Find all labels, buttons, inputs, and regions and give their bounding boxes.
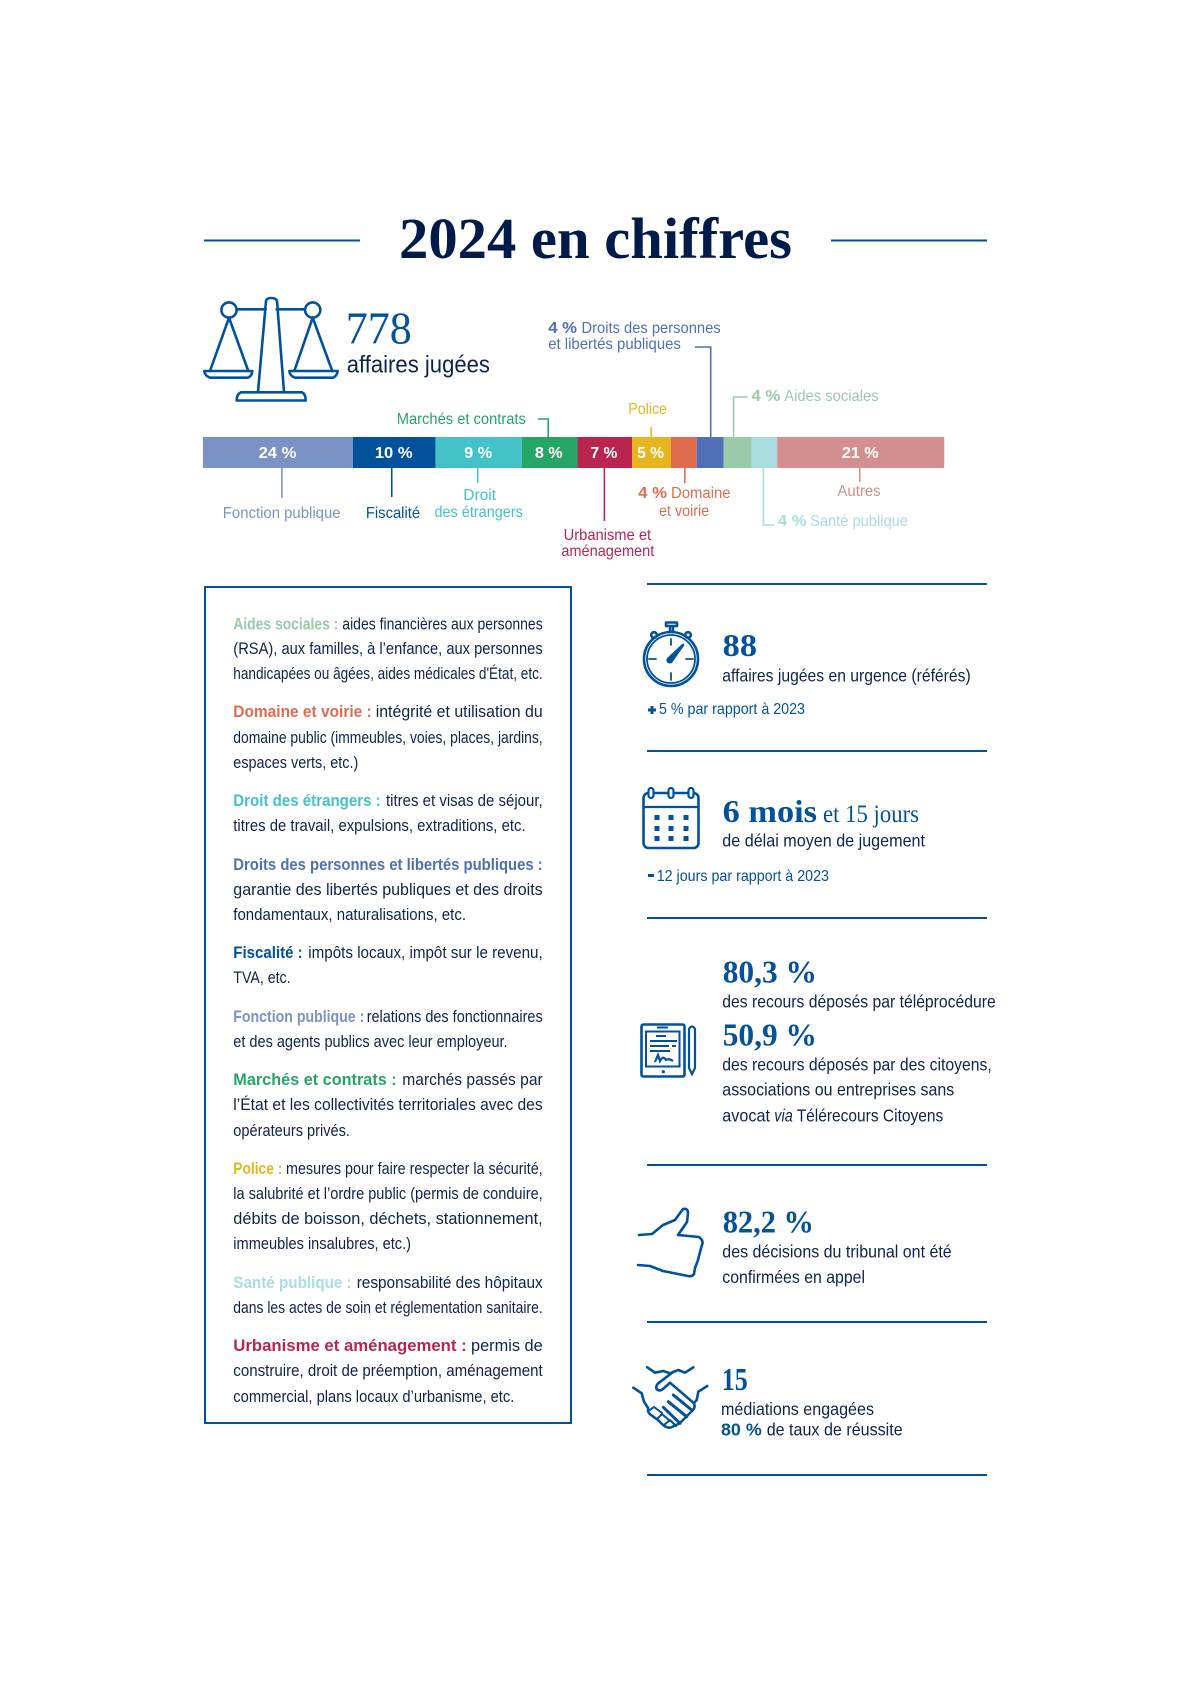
stat: total cases judged: 778 bbox=[346, 302, 412, 353]
definition: Police: Police : bbox=[233, 1160, 282, 1178]
definition: Droits des personnes et libertés publiques bbox=[233, 856, 543, 924]
definition: Domaine et voirie: espaces verts, etc.) bbox=[233, 754, 358, 772]
stacked bar chart: case types: 7 % bbox=[590, 445, 618, 462]
icon: thumbs up bbox=[638, 1209, 703, 1276]
bar label: Droits des personnes bbox=[548, 320, 721, 437]
icon: calendar bbox=[644, 788, 698, 848]
definition: Urbanisme et aménagement: construire, droit de préemption, aménagement bbox=[233, 1362, 543, 1380]
stat: e-filing shares: 50,9 % bbox=[723, 1017, 817, 1053]
stat: mediations: de taux de réussite bbox=[767, 1420, 903, 1440]
definition: Santé publique: responsabilité des hôpitaux bbox=[357, 1274, 543, 1292]
stacked bar chart: case types: 5 % bbox=[637, 445, 664, 462]
definition: Urbanisme et aménagement: commercial, plans locaux d’urbanisme, etc. bbox=[233, 1388, 514, 1406]
definition: Droit des étrangers: titres et visas de séjour, bbox=[386, 792, 543, 810]
definition: Police: mesures pour faire respecter la sécurité, bbox=[286, 1160, 543, 1178]
definition: Police: immeubles insalubres, etc.) bbox=[233, 1235, 411, 1253]
bar label: Fiscalité: Fiscalité bbox=[366, 505, 420, 522]
bar label: Droit des étrangers: des étrangers bbox=[434, 504, 523, 521]
stat: decisions upheld on appeal: 82,2 % bbox=[723, 1204, 814, 1240]
definition: Domaine et voirie: domaine public (immeubles, voies, places, jardins, bbox=[233, 729, 543, 747]
stat: mediations bbox=[721, 1361, 903, 1440]
definition: Fiscalité: impôts locaux, impôt sur le revenu, bbox=[308, 944, 543, 962]
definition: Droit des étrangers bbox=[233, 792, 543, 835]
bar label: Droits des personnes: Droits des personnes bbox=[582, 320, 721, 337]
stacked bar chart: case types: 8 % bbox=[535, 445, 563, 462]
definition: Police: débits de boisson, déchets, stationnement, bbox=[233, 1210, 543, 1228]
stacked bar chart: case types: 9 % bbox=[464, 445, 492, 462]
definition: Fiscalité: Fiscalité : bbox=[233, 944, 303, 962]
stat: e-filing shares: associations ou entreprises sans bbox=[722, 1080, 955, 1100]
stat: e-filing shares: avocat bbox=[722, 1106, 770, 1126]
definition: Domaine et voirie: intégrité et utilisation du bbox=[376, 703, 543, 721]
definition: Santé publique bbox=[233, 1274, 543, 1317]
bar label: Droits des personnes: et libertés publiques bbox=[548, 336, 681, 353]
definition: Domaine et voirie bbox=[233, 703, 543, 772]
definition: Droits des personnes et libertés publiques: Droits des personnes et libertés publiques : bbox=[233, 856, 543, 874]
definition: Marchés et contrats bbox=[233, 1071, 543, 1140]
definition: Aides sociales: handicapées ou âgées, aides médicales d'État, etc. bbox=[233, 664, 543, 683]
stat: e-filing shares bbox=[722, 954, 996, 1126]
stat: e-filing shares: 80,3 % bbox=[723, 954, 817, 990]
definition: Urbanisme et aménagement bbox=[233, 1337, 543, 1406]
bar label: Fonction publique bbox=[223, 468, 341, 522]
stat: urgent cases: 5 % par rapport à 2023 bbox=[659, 701, 805, 718]
panel: glossary of case types bbox=[205, 587, 571, 1423]
definition: Droits des personnes et libertés publiques: fondamentaux, naturalisations, etc. bbox=[233, 906, 466, 924]
bar label: Santé publique: Santé publique bbox=[810, 513, 908, 530]
stacked bar chart section with callout labels bbox=[203, 320, 944, 560]
icon: tablet and stylus bbox=[642, 1024, 695, 1076]
bar label: Police bbox=[628, 401, 667, 437]
definition: Fonction publique: Fonction publique : bbox=[233, 1008, 364, 1026]
bar label: Droits des personnes: 4 % bbox=[548, 320, 577, 337]
bar label: Domaine et voirie bbox=[638, 468, 731, 520]
definition: Urbanisme et aménagement: permis de bbox=[471, 1337, 543, 1355]
stat: urgent cases: 88 bbox=[723, 627, 757, 663]
definition: Domaine et voirie: Domaine et voirie : bbox=[233, 703, 372, 721]
bar label: Aides sociales bbox=[734, 388, 879, 437]
stat: average judgment time: de délai moyen de jugement bbox=[722, 831, 925, 851]
stat: e-filing shares: des recours déposés par des citoyens, bbox=[722, 1055, 992, 1075]
definition: Police: la salubrité et l’ordre public (permis de conduire, bbox=[233, 1185, 543, 1203]
definition: Aides sociales: (RSA), aux familles, à l’enfance, aux personnes bbox=[233, 640, 543, 658]
bar label: Domaine et voirie: Domaine bbox=[671, 485, 731, 502]
definition: Marchés et contrats: Marchés et contrats : bbox=[233, 1071, 397, 1089]
definition: Marchés et contrats: l’État et les collectivités territoriales avec des bbox=[233, 1095, 543, 1114]
bar label: Fonction publique: Fonction publique bbox=[223, 505, 341, 522]
icon: scales of justice bbox=[204, 298, 338, 400]
definition: Aides sociales bbox=[233, 615, 543, 683]
bar label: Urbanisme et aménagement bbox=[561, 468, 655, 560]
bar label: Santé publique bbox=[763, 468, 908, 530]
bar label: Urbanisme et aménagement: aménagement bbox=[561, 543, 655, 560]
stat: decisions upheld on appeal bbox=[722, 1204, 952, 1287]
definition: Fonction publique: relations des fonctionnaires bbox=[367, 1008, 543, 1026]
definition: Droit des étrangers: titres de travail, expulsions, extraditions, etc. bbox=[233, 817, 526, 835]
bar label: Droit des étrangers bbox=[434, 468, 523, 521]
stat: decisions upheld on appeal: des décisions du tribunal ont été bbox=[722, 1241, 952, 1261]
definition: Marchés et contrats: opérateurs privés. bbox=[233, 1122, 350, 1140]
stat: urgent cases bbox=[648, 627, 971, 718]
stacked bar chart: case types bbox=[203, 437, 944, 468]
definition: Santé publique: dans les actes de soin et réglementation sanitaire. bbox=[233, 1299, 543, 1317]
bar label: Autres: Autres bbox=[837, 483, 881, 500]
definition: Police bbox=[233, 1160, 543, 1253]
bar label: Police: Police bbox=[628, 401, 667, 418]
stat: total cases judged: affaires jugées bbox=[347, 351, 490, 378]
bar label: Aides sociales: Aides sociales bbox=[784, 388, 879, 405]
stat: e-filing shares: via bbox=[774, 1106, 793, 1126]
stat: decisions upheld on appeal: confirmées en appel bbox=[722, 1267, 865, 1287]
bar label: Marchés et contrats bbox=[397, 411, 548, 437]
definition: Urbanisme et aménagement: Urbanisme et aménagement : bbox=[233, 1337, 467, 1355]
stat: e-filing shares: Télérecours Citoyens bbox=[797, 1106, 944, 1126]
bar label: Urbanisme et aménagement: Urbanisme et bbox=[564, 527, 652, 544]
icon: handshake bbox=[633, 1367, 707, 1428]
definition: Fonction publique: et des agents publics avec leur employeur. bbox=[233, 1033, 508, 1051]
stat: mediations: médiations engagées bbox=[721, 1399, 874, 1419]
stat: total cases judged bbox=[346, 302, 490, 378]
stat: average judgment time: et 15 jours bbox=[823, 801, 919, 828]
stat: average judgment time: 12 jours par rapport à 2023 bbox=[657, 868, 829, 885]
stat: urgent cases: affaires jugées en urgence (référés) bbox=[722, 666, 971, 686]
stat: e-filing shares: des recours déposés par téléprocédure bbox=[722, 992, 996, 1012]
definition: Fiscalité bbox=[233, 944, 543, 987]
bar label: Domaine et voirie: 4 % bbox=[638, 485, 667, 502]
definition: Droit des étrangers: Droit des étrangers : bbox=[233, 792, 381, 810]
bar label: Aides sociales: 4 % bbox=[751, 388, 780, 405]
bar label: Fiscalité bbox=[366, 468, 420, 522]
definition: Aides sociales: aides financières aux personnes bbox=[342, 615, 543, 633]
definition: Fonction publique bbox=[233, 1008, 543, 1051]
bar label: Autres bbox=[837, 468, 881, 500]
bar label: Santé publique: 4 % bbox=[778, 513, 807, 530]
definition: Aides sociales: Aides sociales : bbox=[233, 615, 338, 633]
icon: stopwatch bbox=[644, 622, 698, 686]
stacked bar chart: case types: 10 % bbox=[375, 445, 413, 462]
definition: Droits des personnes et libertés publiques: garantie des libertés publiques et des droits bbox=[233, 881, 543, 899]
bar label: Marchés et contrats: Marchés et contrats bbox=[397, 411, 526, 428]
stat: mediations: 80 % bbox=[721, 1420, 762, 1440]
definition: Santé publique: Santé publique : bbox=[233, 1274, 352, 1292]
bar label: Domaine et voirie: et voirie bbox=[659, 503, 709, 520]
definition: Marchés et contrats: marchés passés par bbox=[402, 1071, 543, 1089]
stat: average judgment time: 6 mois bbox=[723, 793, 817, 829]
stacked bar chart: case types: 24 % bbox=[259, 445, 297, 462]
definition: Fiscalité: TVA, etc. bbox=[233, 969, 291, 987]
title: 2024 en chiffres bbox=[399, 206, 792, 271]
bar label: Droit des étrangers: Droit bbox=[463, 487, 497, 504]
stat: mediations: 15 bbox=[722, 1361, 748, 1397]
stacked bar chart: case types: 21 % bbox=[842, 445, 879, 462]
stat: average judgment time bbox=[648, 793, 925, 885]
